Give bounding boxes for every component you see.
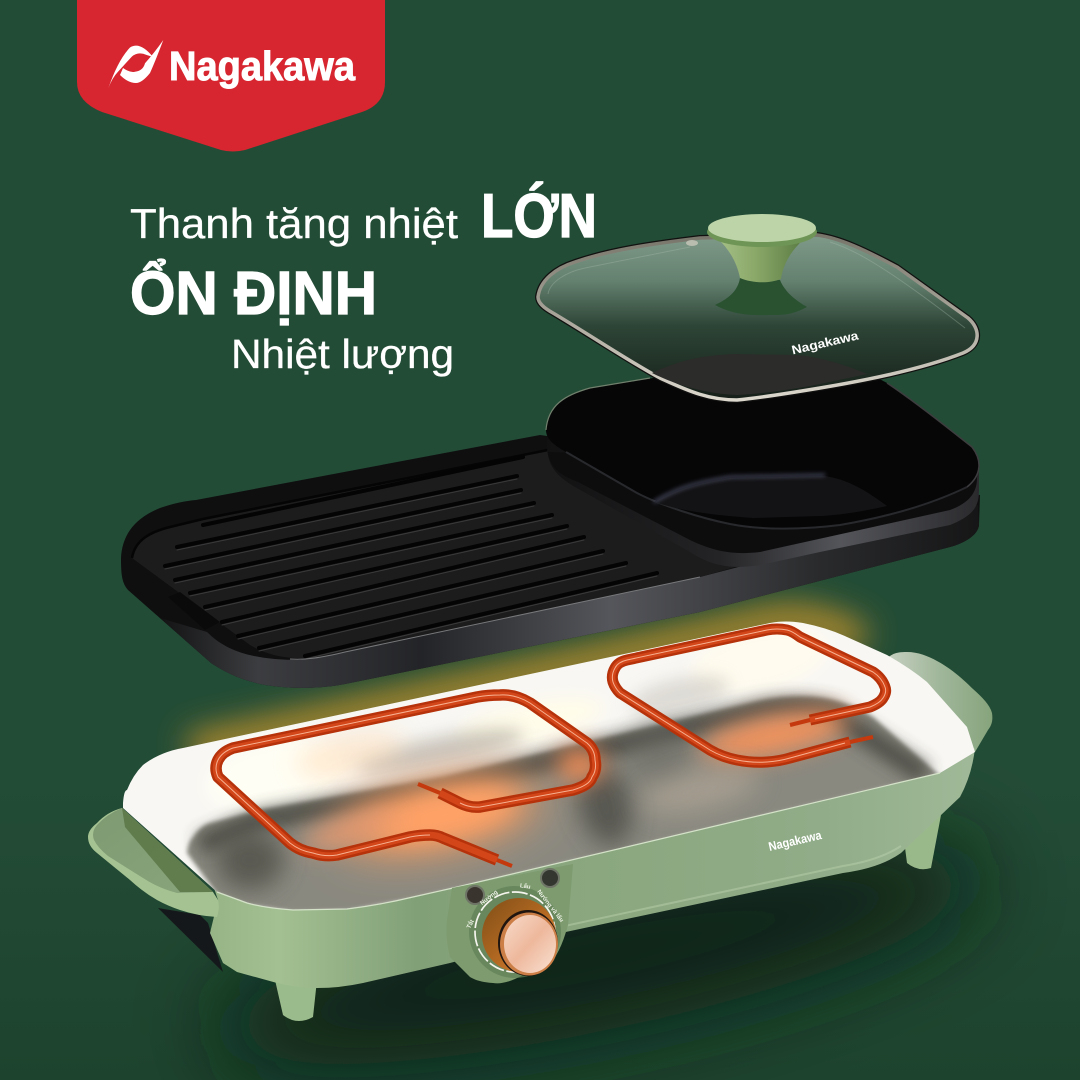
vent xyxy=(158,908,223,972)
brand name: Nagakawa xyxy=(169,43,356,89)
headline line 2: ỔN ĐỊNH xyxy=(130,258,377,327)
dial knob base xyxy=(482,898,556,972)
brand banner xyxy=(77,0,385,152)
floor shadows xyxy=(200,707,925,845)
indicator light 2 xyxy=(541,869,559,887)
left heating coil xyxy=(216,695,596,866)
left handle xyxy=(88,808,219,917)
base body xyxy=(210,748,975,988)
headline line 1: Thanh tăng nhiệt xyxy=(130,200,458,247)
dial labels: Lẩu xyxy=(519,882,531,891)
lid knob reflection xyxy=(715,278,807,315)
glass lid xyxy=(538,214,977,400)
lid knob xyxy=(707,214,817,282)
grill plate xyxy=(121,435,980,688)
base heat glow xyxy=(190,620,862,750)
headline emphasis: LỚN xyxy=(481,182,597,251)
wall hot spots xyxy=(199,727,351,823)
base logo: Nagakawa xyxy=(767,828,824,854)
dial labels xyxy=(465,882,565,930)
dial knob cap xyxy=(498,910,558,976)
lid see-through pan xyxy=(652,354,867,395)
right heating coil xyxy=(612,629,886,762)
shadow under appliance xyxy=(203,801,997,1080)
electric base xyxy=(88,600,1000,1021)
icon: brand swoosh logo xyxy=(108,40,163,88)
dial labels: Nướng và lẩu xyxy=(535,889,565,924)
indicator light 1 xyxy=(466,886,484,904)
lid vent xyxy=(686,240,698,246)
right handle xyxy=(885,652,992,752)
dial labels: Tắt xyxy=(465,919,476,930)
dial scale xyxy=(475,892,555,972)
pan bowl xyxy=(546,357,979,529)
dial labels: Nướng xyxy=(480,889,499,907)
headline line 3: Nhiệt lượng xyxy=(231,331,454,377)
headline text xyxy=(130,182,597,377)
right leg xyxy=(904,815,941,869)
grill notch xyxy=(168,592,220,630)
pan floor xyxy=(654,476,887,518)
grill ribs xyxy=(165,457,657,659)
basin interior xyxy=(123,622,975,910)
orange glow on floor xyxy=(336,763,544,867)
hot pot pan xyxy=(546,357,979,567)
control panel xyxy=(446,864,573,983)
basin floor xyxy=(187,696,940,912)
left leg xyxy=(275,980,317,1021)
wall shading xyxy=(356,722,526,780)
lid logo: Nagakawa xyxy=(790,328,861,357)
